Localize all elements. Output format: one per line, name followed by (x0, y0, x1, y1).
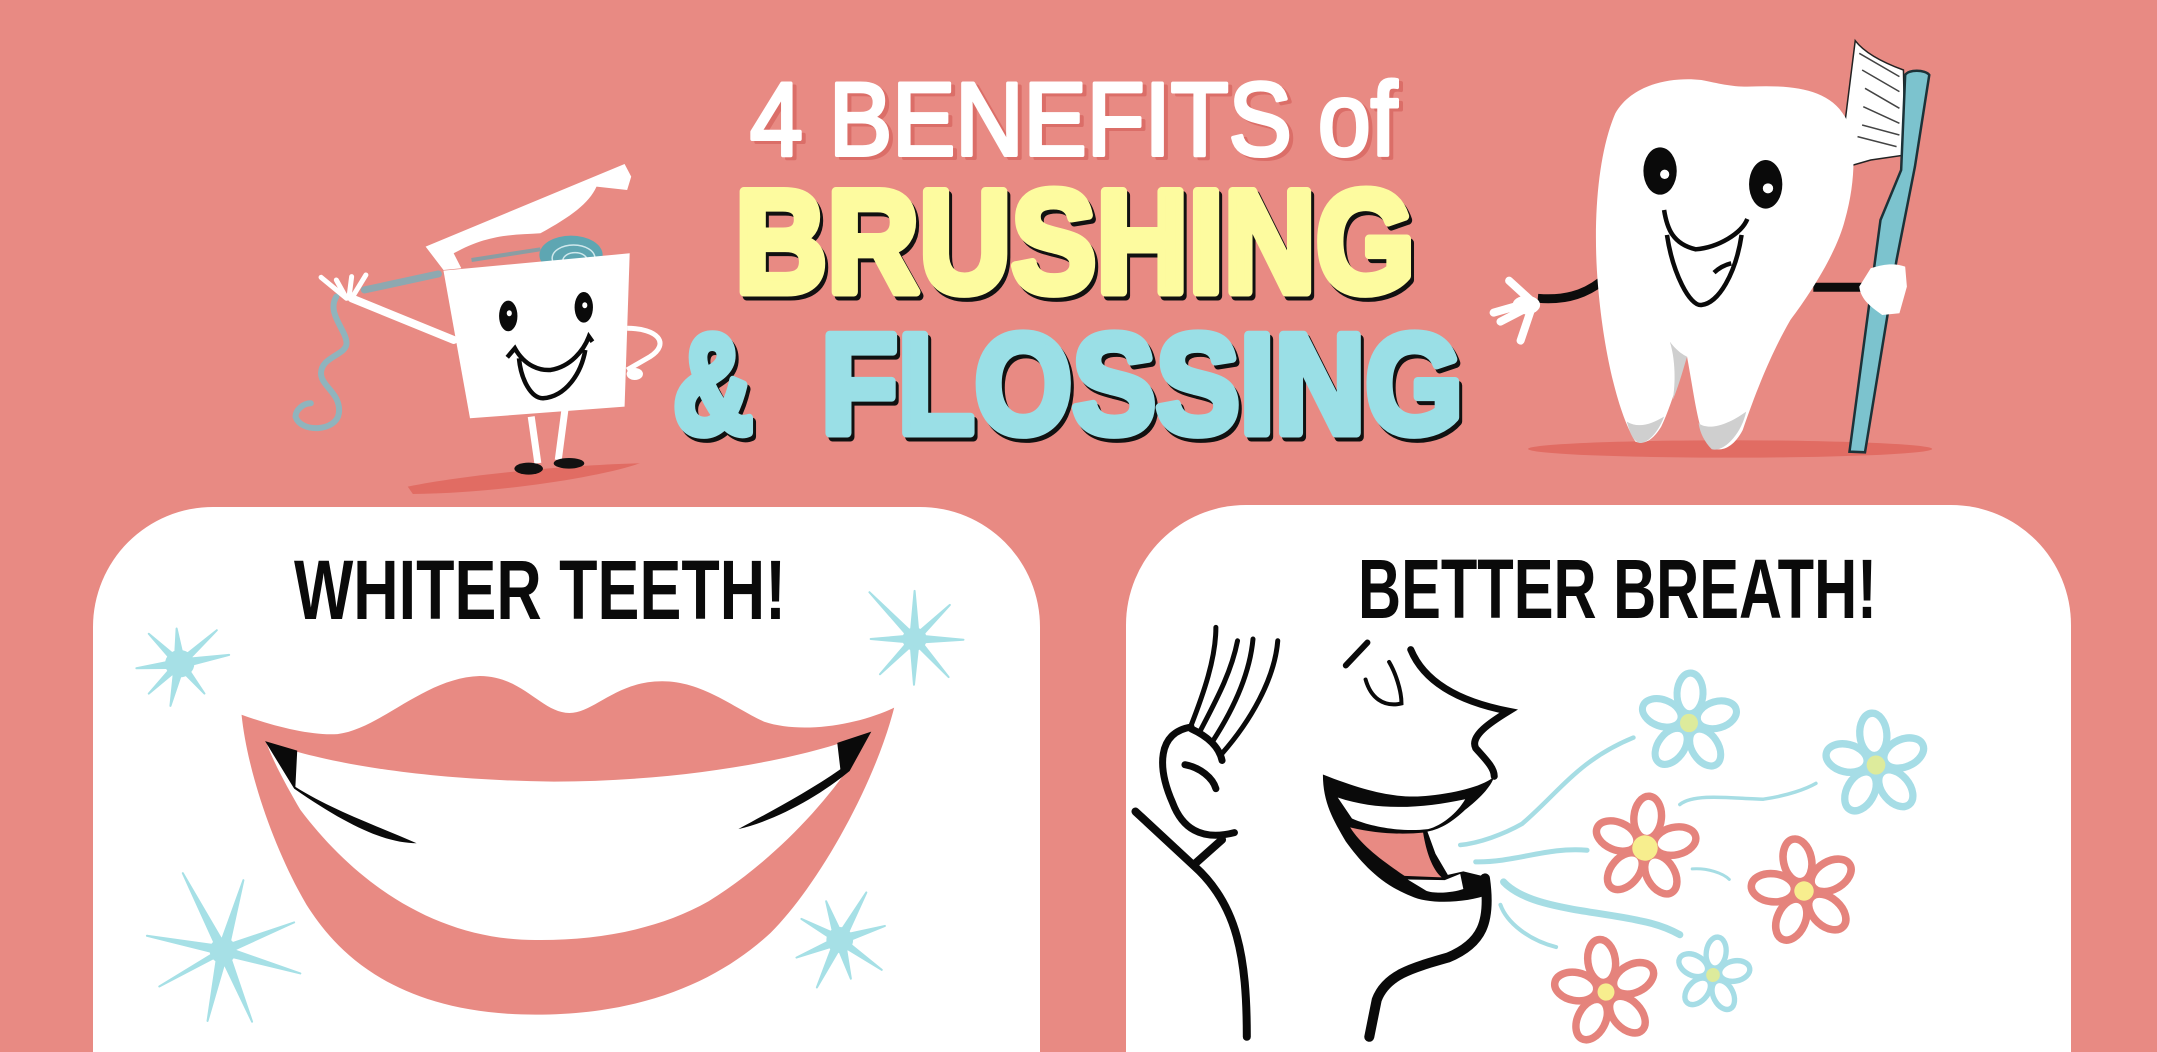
title line: 4 Benefits of: 4 BENEFITS of (754, 65, 1402, 181)
heading: WHITER TEETH! (294, 543, 786, 637)
panel: whiter teeth (93, 507, 1040, 1052)
ear (1163, 727, 1234, 835)
title (673, 62, 1466, 468)
sparkle: bottom left (147, 873, 300, 1022)
open mouth (1323, 775, 1494, 902)
title line: & Flossing: FLOSSING (824, 309, 1466, 468)
panel: better breath (1126, 505, 2071, 1052)
sparkle: top left (136, 628, 229, 706)
ground shadow (408, 463, 640, 494)
title line: & Flossing: FLOSSING (821, 305, 1463, 464)
neck back (1135, 812, 1247, 1037)
smile (507, 337, 592, 398)
floss spool (472, 236, 603, 274)
teeth (266, 732, 871, 940)
floss box character (296, 164, 660, 494)
eyes (499, 292, 593, 331)
toothbrush bristles (1841, 41, 1905, 167)
chin and neck front (1369, 878, 1487, 1037)
hair (1191, 627, 1278, 753)
eyes (1643, 147, 1782, 209)
arms (1538, 282, 1865, 299)
shoes (514, 458, 584, 475)
root shading (1627, 342, 1746, 450)
title line: Brushing: BRUSHING (735, 160, 1415, 323)
eyebrow (1346, 643, 1367, 665)
flower: blue right (1819, 709, 1933, 820)
title line: Brushing: BRUSHING (738, 164, 1418, 327)
flower: pink bottom (1546, 932, 1666, 1050)
smile illustration (136, 591, 963, 1022)
flower: small blue (1670, 932, 1756, 1017)
heading: BETTER BREATH! (1358, 542, 1877, 636)
box body (443, 253, 630, 418)
breath wisps (1460, 738, 1816, 947)
title line: & Flossing: & (676, 309, 756, 468)
title line: 4 Benefits of: 4 BENEFITS of (750, 62, 1398, 178)
flower: pink right (1740, 828, 1868, 952)
right hand (627, 368, 643, 380)
lips (242, 676, 894, 1015)
flower: pink centre (1587, 792, 1703, 903)
flower: blue top (1637, 671, 1741, 773)
smile (1664, 210, 1747, 305)
left arm and hand (321, 275, 454, 340)
panel background (1126, 505, 2071, 1052)
toothbrush handle (1849, 71, 1929, 452)
tooth character with toothbrush (1494, 41, 1932, 458)
right arm (627, 328, 660, 370)
gripping hand (1859, 264, 1907, 315)
waving hand (1494, 281, 1540, 341)
floss strand (296, 274, 438, 428)
ground shadow (1528, 440, 1932, 458)
title line: & Flossing: & (673, 305, 753, 464)
legs (531, 410, 565, 463)
mouth corner lines (265, 732, 871, 843)
sparkle: bottom right (796, 892, 885, 988)
closed eye (1366, 662, 1401, 704)
nose profile (1411, 650, 1508, 776)
panel background (93, 507, 1040, 1052)
face illustration (1135, 627, 1508, 1037)
tooth body (1596, 79, 1854, 449)
box lid (426, 164, 631, 270)
sparkle: top right (869, 591, 963, 685)
